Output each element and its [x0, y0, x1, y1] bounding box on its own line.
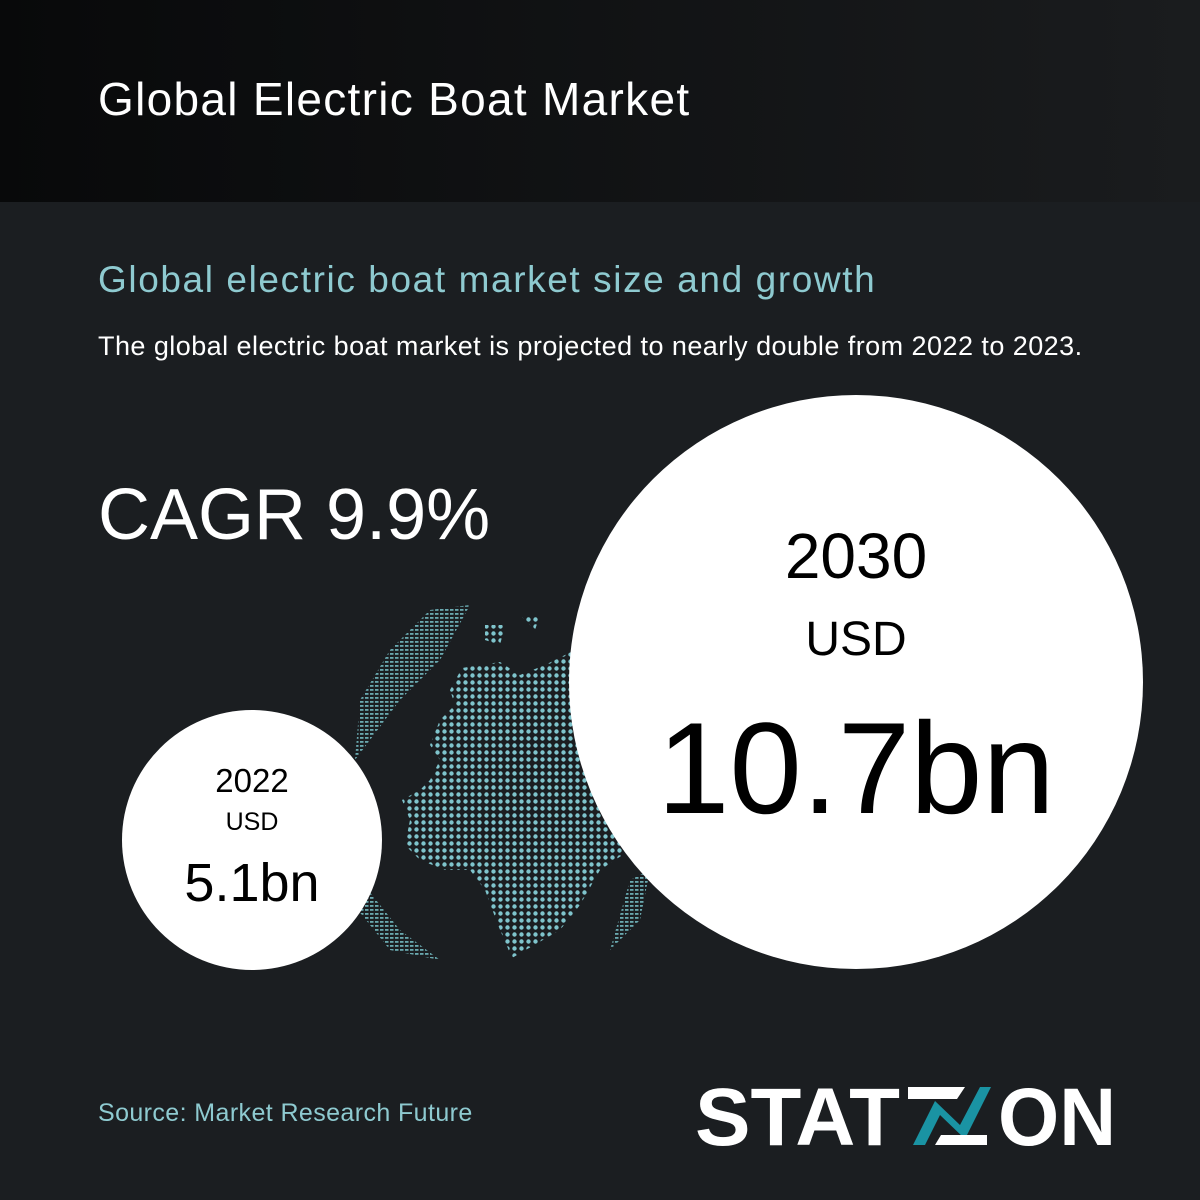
header band	[0, 0, 1200, 202]
source: Source: Market Research Future	[98, 1099, 473, 1127]
logo: STATZON	[695, 1083, 1116, 1148]
value 5.1bn: 5.1bn	[184, 853, 320, 913]
title: Global Electric Boat Market	[98, 73, 690, 125]
year 2030: 2030	[785, 520, 927, 592]
year 2022: 2022	[215, 762, 289, 799]
subtitle: Global electric boat market size and growth	[98, 259, 876, 300]
unit USD: USD	[805, 613, 907, 666]
CAGR: CAGR 9.9%	[98, 475, 490, 555]
circle: 2022 value	[122, 710, 382, 970]
globe illustration	[355, 605, 648, 959]
value 10.7bn: 10.7bn	[657, 695, 1055, 841]
description: The global electric boat market is projected to nearly double from 2022 to 2023.	[98, 331, 1083, 361]
unit USD: USD	[226, 808, 278, 836]
circle: 2030 value	[569, 395, 1143, 969]
